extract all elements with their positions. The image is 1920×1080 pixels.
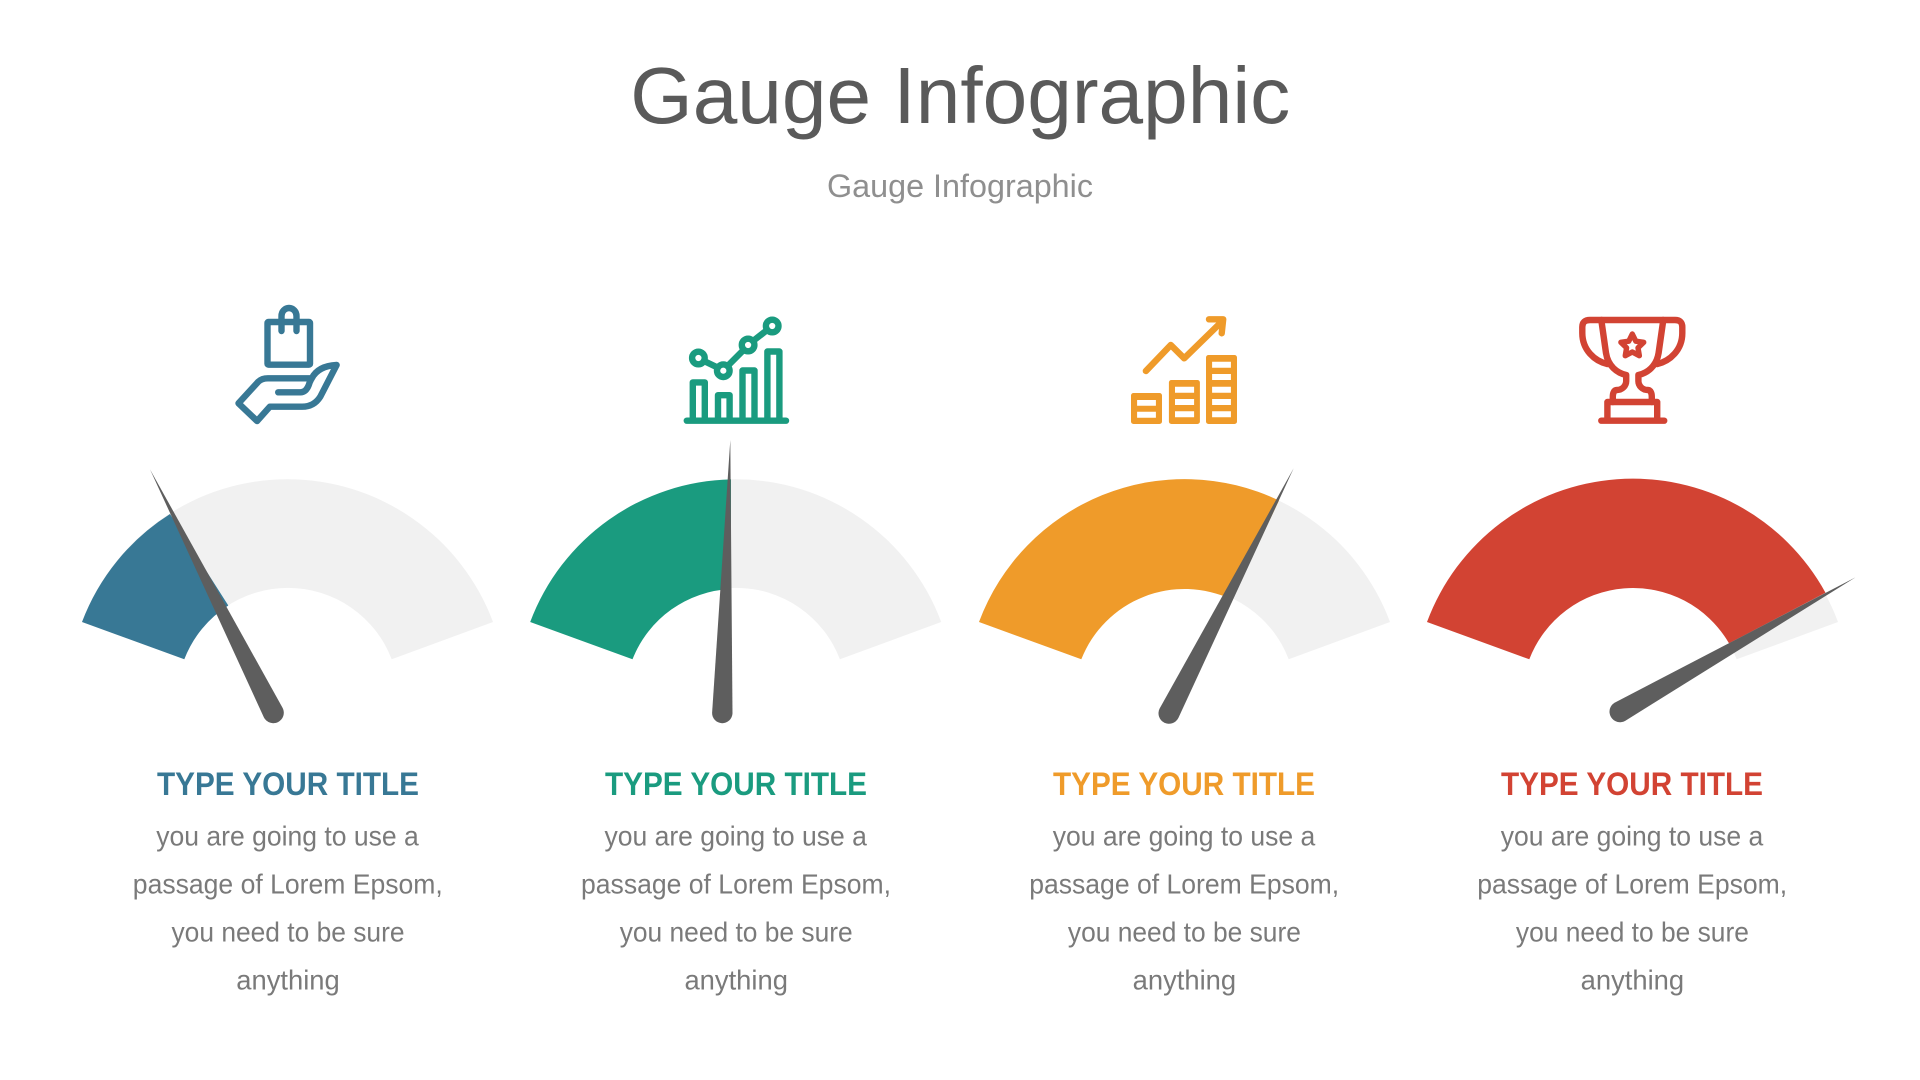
card body text: you need to be sure — [172, 916, 404, 947]
icon: hand holding shopping bag — [238, 308, 337, 421]
card body text: you are going to use a — [1053, 821, 1316, 852]
gauge needle — [141, 465, 287, 727]
card body text: passage of Lorem Epsom, — [1029, 868, 1339, 900]
gauge fill — [979, 479, 1279, 659]
card body text: you are going to use a — [1501, 821, 1764, 852]
panel: orange gauge — [979, 319, 1390, 995]
card body text: you need to be sure — [620, 916, 853, 947]
card body text: anything — [236, 964, 340, 995]
card body text: you need to be sure — [1068, 916, 1301, 947]
gauge track — [530, 479, 941, 659]
card body text: passage of Lorem Epsom, — [133, 868, 443, 900]
card heading: TYPE YOUR TITLE — [157, 766, 419, 802]
gauge needle — [1155, 464, 1303, 727]
gauge needle — [712, 440, 741, 723]
icon: rising coin stacks with arrow — [1131, 319, 1237, 424]
card body text: passage of Lorem Epsom, — [1477, 868, 1787, 900]
card body text: you need to be sure — [1516, 916, 1749, 947]
icon: bar chart with trend line — [687, 320, 786, 421]
card body text: anything — [1581, 964, 1684, 995]
gauge needle — [1606, 568, 1861, 726]
card body text: you are going to use a — [604, 821, 867, 852]
icon: trophy with star — [1582, 320, 1682, 421]
card body text: passage of Lorem Epsom, — [581, 868, 891, 900]
card heading: TYPE YOUR TITLE — [1053, 766, 1315, 802]
card body text: anything — [1133, 964, 1236, 995]
panel: green gauge — [530, 320, 941, 995]
panel: red gauge — [1427, 320, 1861, 995]
gauge track — [1427, 479, 1838, 659]
gauge track — [979, 479, 1390, 659]
gauge track — [82, 479, 493, 659]
card body text — [581, 821, 891, 995]
gauge fill — [82, 514, 228, 659]
title: Gauge Infographic — [630, 51, 1290, 140]
card body text: you are going to use a — [156, 821, 419, 852]
card body text — [1029, 821, 1339, 995]
card heading: TYPE YOUR TITLE — [605, 766, 867, 802]
card body text — [1477, 821, 1787, 995]
subtitle: Gauge Infographic — [827, 168, 1093, 204]
card body text — [133, 821, 443, 995]
gauge fill — [1427, 479, 1826, 659]
panel: blue gauge — [82, 308, 493, 995]
gauge fill — [530, 479, 731, 659]
card body text: anything — [684, 964, 788, 995]
card heading: TYPE YOUR TITLE — [1501, 766, 1763, 802]
